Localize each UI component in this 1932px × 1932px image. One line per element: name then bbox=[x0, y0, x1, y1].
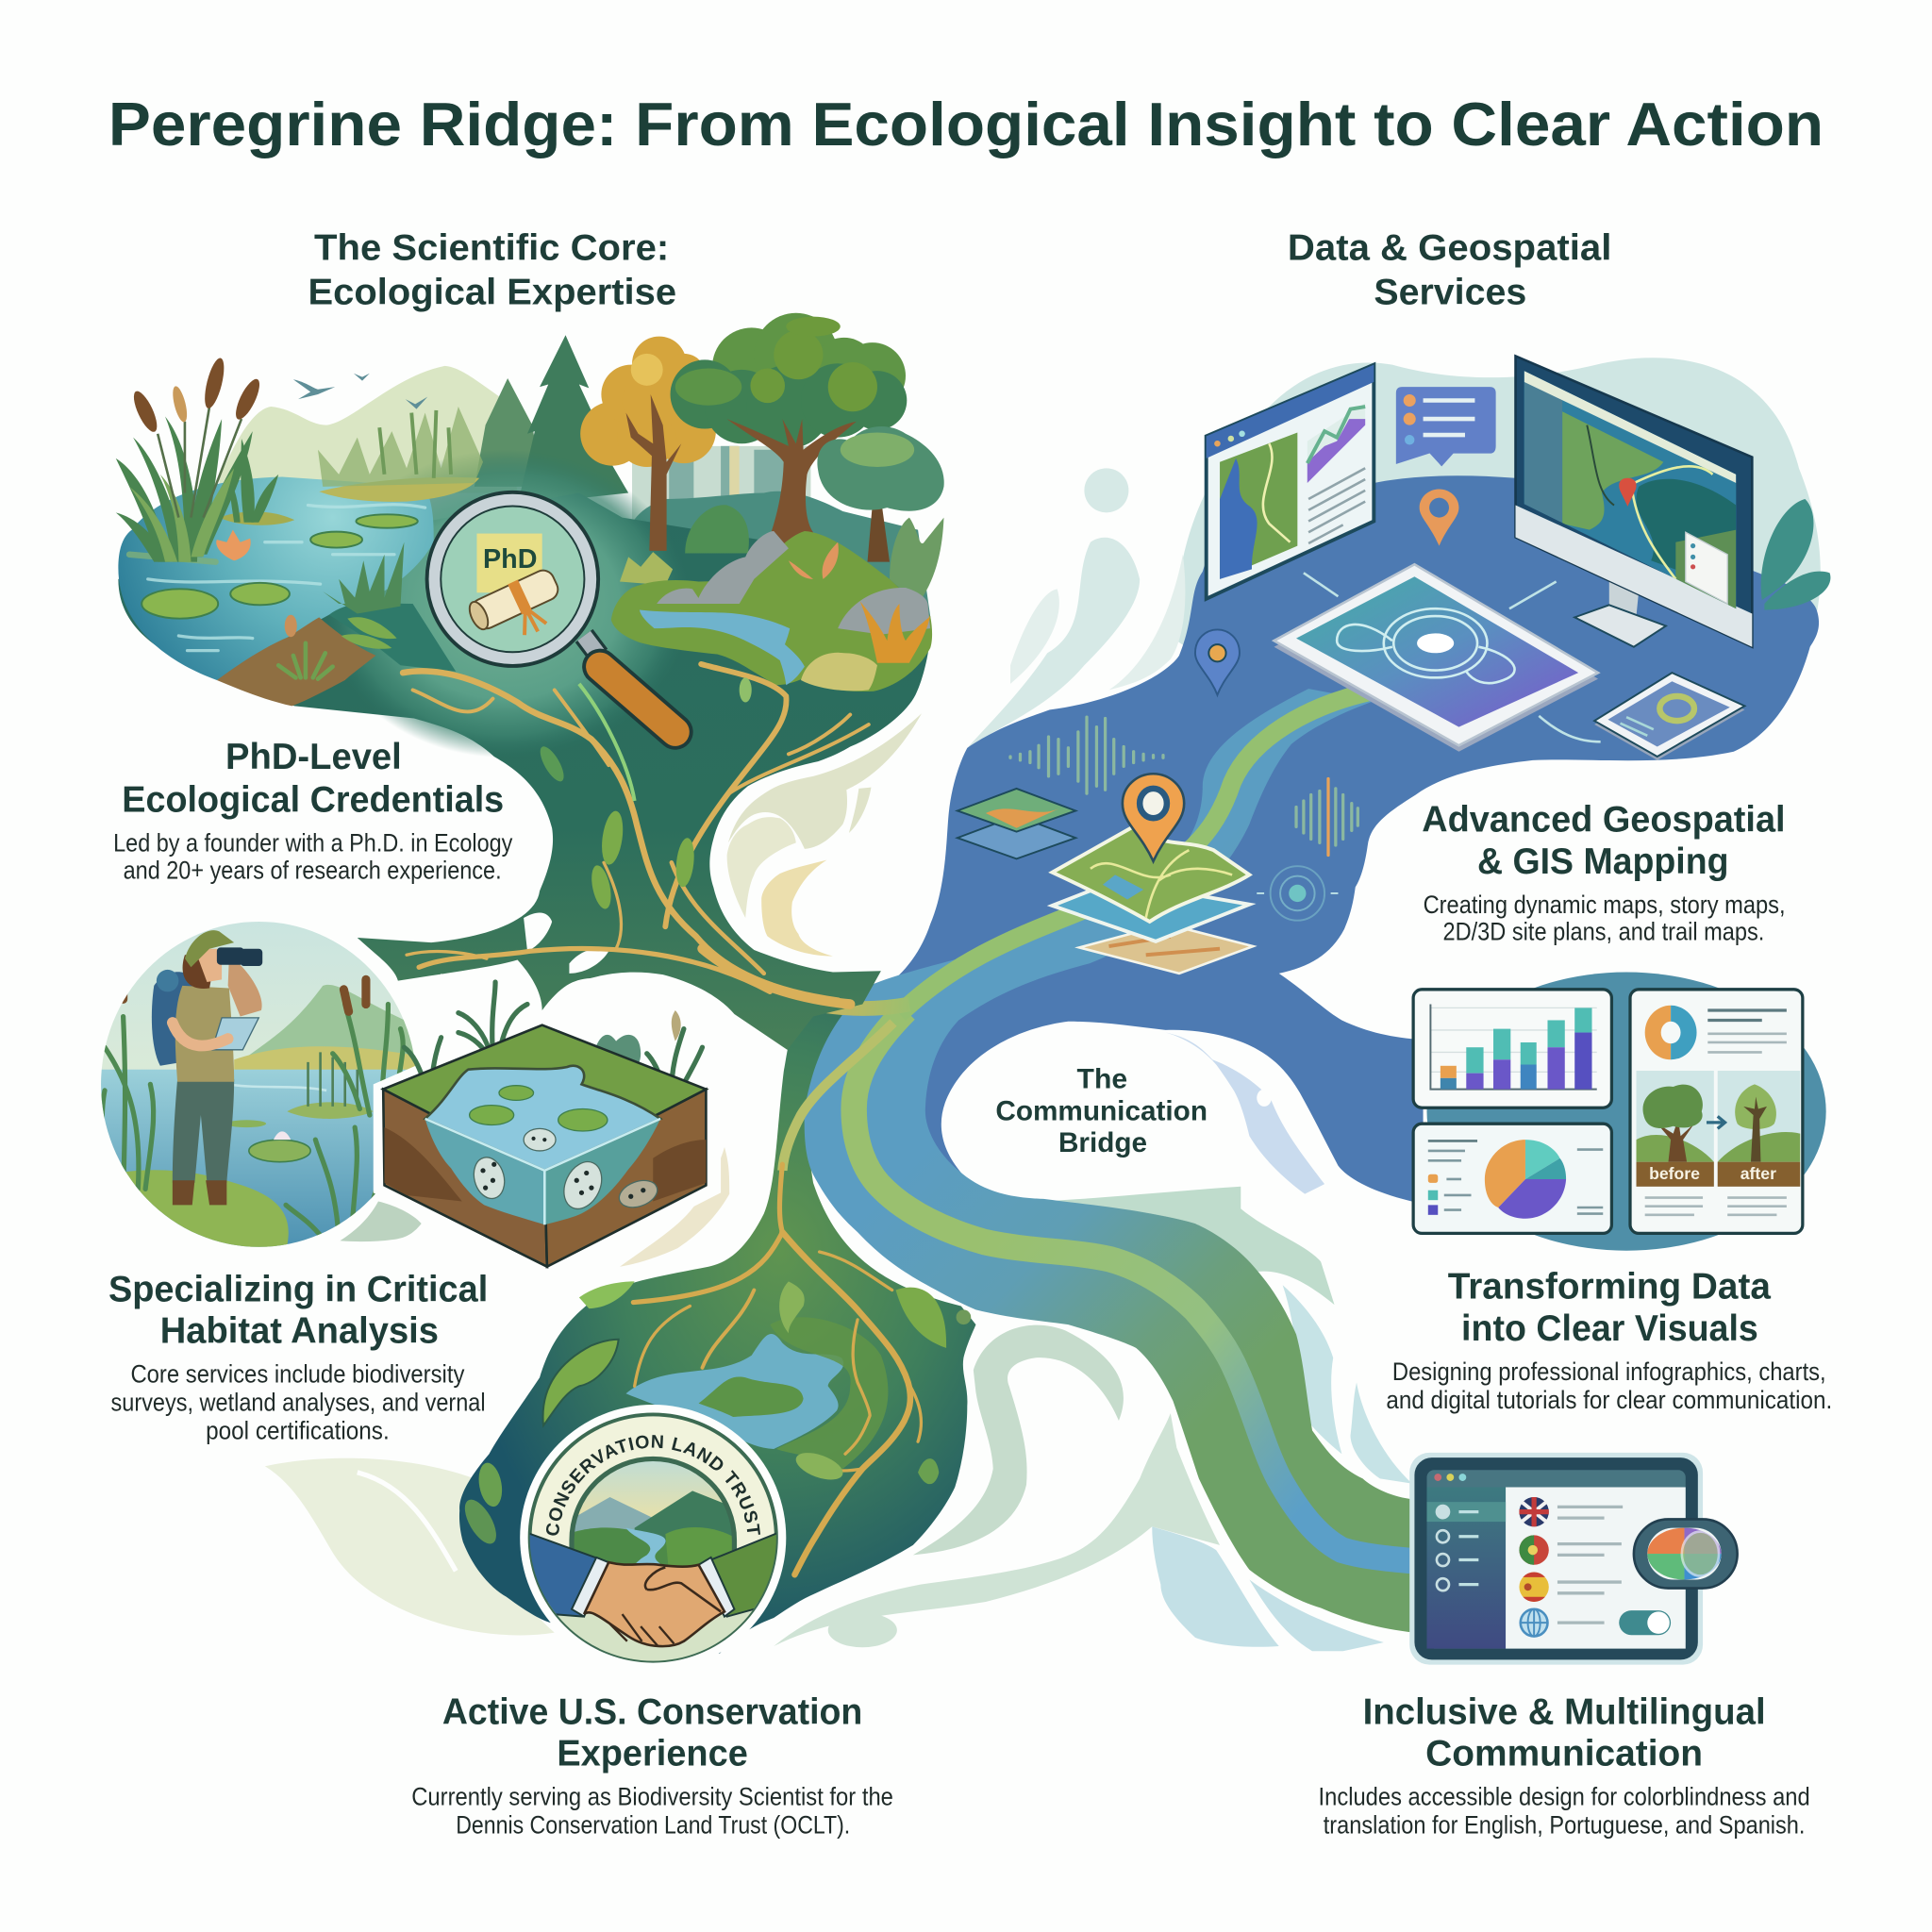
text block: phd-level ecological credentials bbox=[113, 737, 513, 884]
toggle bbox=[1619, 1610, 1671, 1635]
pond in lower blob bbox=[626, 1334, 843, 1449]
gold tree bbox=[580, 337, 716, 551]
hat bbox=[185, 930, 234, 967]
far shore reeds bbox=[318, 407, 483, 487]
heading: data and geospatial services bbox=[1288, 228, 1611, 313]
trunk bbox=[727, 419, 857, 579]
icon: small layers bbox=[958, 789, 1075, 858]
pale swooshes by devices bbox=[967, 468, 1185, 748]
leaf: upper left bbox=[579, 1281, 635, 1308]
text block: advanced geospatial and gis mapping: 2D/3D site plans, and trail maps. bbox=[1442, 918, 1764, 946]
after label: after bbox=[1740, 1164, 1776, 1183]
globe bbox=[1521, 1609, 1547, 1637]
island in pond bbox=[699, 1377, 804, 1417]
cream swirl beside trunk bbox=[727, 713, 922, 957]
icon: sound wave left bbox=[1010, 717, 1163, 793]
icon: website panel with map bbox=[1207, 365, 1374, 599]
text block: phd-level ecological credentials: and 20+ years of research experience. bbox=[124, 856, 502, 884]
big tree bbox=[671, 313, 907, 579]
icon: blue pin bbox=[1195, 629, 1240, 695]
text block: active u.s. conservation experience: Active U.S. Conservation bbox=[442, 1691, 862, 1732]
near reed clump bbox=[116, 416, 278, 562]
boots bbox=[173, 1180, 226, 1205]
green glow around lens bbox=[321, 450, 690, 758]
map pin bbox=[1123, 774, 1184, 861]
upper stripe to devices bbox=[899, 690, 1377, 1014]
icon: magnifying glass with PhD diploma bbox=[425, 491, 675, 732]
gold roots lower bbox=[633, 1164, 921, 1574]
icon: scientist with binoculars bbox=[152, 930, 262, 1205]
text block: inclusive and multilingual communication: Communication bbox=[1425, 1734, 1703, 1774]
sky hill bbox=[219, 366, 518, 492]
icon: sound wave right bbox=[1296, 778, 1357, 855]
panel: lower ecological root blob bbox=[459, 1004, 975, 1654]
orange water flower bbox=[216, 530, 251, 560]
lower blob details bbox=[458, 1164, 971, 1574]
pale arch below river bbox=[913, 1325, 1124, 1555]
amphibian egg masses bbox=[470, 1128, 661, 1215]
leaf group lower blob bbox=[458, 1281, 971, 1549]
text block: phd-level ecological credentials: Ecological Credentials bbox=[122, 780, 504, 821]
face bbox=[194, 949, 222, 982]
donut and before after card bbox=[1630, 990, 1803, 1233]
text block: advanced geospatial and gis mapping bbox=[1422, 800, 1786, 946]
pale blue swish in bridge bubble bbox=[1166, 1033, 1324, 1194]
text block: specializing in critical habitat analysis: Core services include biodiversity bbox=[130, 1359, 465, 1388]
icon: computer monitor with map bbox=[1516, 356, 1830, 647]
after tree bbox=[1735, 1084, 1776, 1162]
text block: active u.s. conservation experience: Experience bbox=[557, 1734, 748, 1774]
water ripples bbox=[129, 505, 425, 651]
left stripe branch into roots bbox=[776, 995, 909, 1008]
arrow bbox=[1707, 1116, 1725, 1128]
pine trees bbox=[475, 335, 628, 506]
legs bbox=[173, 1079, 234, 1183]
text block: transforming data into clear visuals: Transforming Data bbox=[1448, 1267, 1772, 1307]
forest bush mass bbox=[623, 491, 930, 616]
panel: field scientist scene bbox=[101, 922, 415, 1247]
main river stripe bbox=[854, 1010, 1414, 1561]
green land bbox=[770, 1317, 888, 1473]
stand bbox=[1609, 579, 1639, 616]
pale blue right of river bbox=[1283, 1285, 1341, 1454]
vest bbox=[175, 986, 234, 1082]
icon: connector lines bbox=[1304, 573, 1601, 741]
left soil face bbox=[383, 1090, 547, 1267]
text block: transforming data into clear visuals bbox=[1386, 1267, 1832, 1414]
text block: active u.s. conservation experience: Currently serving as Biodiversity Scientist for the bbox=[411, 1782, 893, 1810]
cattail stems bbox=[158, 407, 242, 518]
trunk leaves bbox=[536, 677, 752, 910]
before label: before bbox=[1649, 1164, 1700, 1183]
cream behind cube bbox=[620, 1147, 729, 1267]
icon: small tablet bbox=[1594, 673, 1744, 760]
pool lily pads bbox=[470, 1086, 608, 1131]
badge landscape bbox=[574, 1461, 732, 1566]
text block: transforming data into clear visuals: into Clear Visuals bbox=[1461, 1308, 1758, 1349]
binoculars bbox=[217, 947, 262, 966]
handle bbox=[584, 636, 599, 656]
text block: advanced geospatial and gis mapping: Advanced Geospatial bbox=[1422, 800, 1786, 841]
text block: transforming data into clear visuals: and digital tutorials for clear communication. bbox=[1386, 1386, 1832, 1414]
bar chart card bbox=[1413, 990, 1611, 1108]
white halo behind habitat cube bbox=[374, 1010, 721, 1281]
text block: phd-level ecological credentials: Led by a founder with a Ph.D. in Ecology bbox=[113, 829, 513, 858]
donut bbox=[1645, 1006, 1671, 1059]
leaf: big left bbox=[543, 1340, 619, 1425]
pale oval bbox=[828, 1613, 897, 1647]
flag Portugal bbox=[1519, 1535, 1549, 1565]
pool surface bbox=[425, 1066, 660, 1171]
tablet bbox=[212, 1018, 258, 1050]
label: the communication bridge: The bbox=[1077, 1063, 1127, 1094]
flag Spain bbox=[1519, 1573, 1549, 1602]
birds bbox=[293, 374, 427, 409]
heading: data and geospatial services: Services bbox=[1374, 273, 1526, 313]
cattails bbox=[129, 357, 264, 435]
text block: inclusive and multilingual communication: Inclusive & Multilingual bbox=[1363, 1691, 1766, 1732]
meadow island bbox=[611, 531, 932, 691]
crown highlights bbox=[675, 317, 877, 411]
tree and trunk mass bbox=[118, 492, 931, 1050]
front crown bbox=[671, 359, 907, 448]
small right tree bbox=[817, 426, 944, 562]
reeds in scene bbox=[98, 1004, 403, 1239]
far shore bbox=[319, 477, 479, 502]
text block: specializing in critical habitat analysis bbox=[108, 1269, 488, 1445]
rocks bbox=[657, 531, 930, 635]
flag UK bbox=[1519, 1497, 1549, 1526]
text block: advanced geospatial and gis mapping: Creating dynamic maps, story maps, bbox=[1424, 891, 1786, 919]
stream bbox=[640, 610, 805, 685]
badge lettering: CONSERVATION LAND TRUST bbox=[546, 1435, 760, 1536]
icon: vernal pool habitat cube bbox=[383, 982, 706, 1267]
bank grass bbox=[278, 643, 333, 679]
pale green crescent by scene bbox=[340, 1201, 422, 1241]
icon: tablet with radar bbox=[1274, 564, 1598, 752]
hair bbox=[183, 955, 216, 989]
icon: multilingual tablet interface bbox=[1409, 1453, 1738, 1665]
text block: inclusive and multilingual communication bbox=[1319, 1691, 1810, 1840]
arm bbox=[228, 955, 262, 1017]
panel: data and geospatial services pale backdrop bbox=[1176, 358, 1821, 764]
pale blue below river bbox=[1152, 1526, 1279, 1647]
panel: upper ecological tree blob bbox=[116, 313, 944, 1050]
right soil face bbox=[544, 1090, 706, 1267]
background swooshes bbox=[265, 713, 1412, 1651]
background green bush bbox=[685, 505, 749, 553]
text block: specializing in critical habitat analysis: pool certifications. bbox=[206, 1417, 390, 1445]
text block: active u.s. conservation experience bbox=[411, 1691, 893, 1840]
label: the communication bridge bbox=[995, 1063, 1208, 1158]
lily pads bbox=[142, 514, 418, 619]
back crown bbox=[712, 313, 906, 409]
pond bbox=[118, 476, 434, 680]
icon: chat bubble bbox=[1395, 386, 1497, 468]
badge lower field bbox=[530, 1532, 776, 1661]
text block: specializing in critical habitat analysis: surveys, wetland analyses, and vernal bbox=[111, 1389, 486, 1417]
pale left of lower blob bbox=[265, 1458, 555, 1635]
pie bbox=[1485, 1140, 1525, 1208]
heading: data and geospatial services: Data & Geospatial bbox=[1288, 228, 1611, 269]
leaves by monitor bbox=[1761, 499, 1830, 610]
pie chart card bbox=[1413, 1124, 1611, 1233]
title: Peregrine Ridge: From Ecological Insight to Clear Action bbox=[108, 90, 1824, 158]
heading: the scientific core: The Scientific Core: bbox=[314, 228, 669, 269]
pale foreground plant bbox=[801, 653, 877, 691]
forest backdrop bbox=[632, 446, 810, 530]
panel: geospatial blue stream bbox=[862, 475, 1819, 1214]
right leafy plant bbox=[890, 518, 943, 604]
panel: data visuals backdrop bbox=[1426, 973, 1826, 1251]
colorblind lens bbox=[1634, 1519, 1738, 1589]
panel: data visuals cards bbox=[1413, 990, 1803, 1233]
lens bbox=[425, 491, 600, 668]
icon: stacked map layers with pin bbox=[1052, 774, 1253, 974]
blue sleeve bbox=[530, 1533, 608, 1618]
icon: orange pin bbox=[1420, 490, 1458, 546]
water block left bbox=[425, 1119, 544, 1224]
text block: active u.s. conservation experience: Dennis Conservation Land Trust (OCLT). bbox=[456, 1811, 850, 1840]
text block: phd-level ecological credentials: PhD-Level bbox=[225, 737, 402, 777]
handshake bbox=[584, 1562, 724, 1646]
text block: advanced geospatial and gis mapping: & GIS Mapping bbox=[1477, 841, 1728, 882]
label: the communication bridge: Communication bbox=[995, 1095, 1208, 1126]
mid grass bbox=[323, 542, 404, 613]
after scene bbox=[1718, 1071, 1800, 1187]
forearm bbox=[173, 1023, 228, 1045]
water block right bbox=[544, 1119, 660, 1224]
white gaps in trunk bbox=[438, 912, 608, 1025]
down stripe branch into roots bbox=[782, 1023, 893, 1171]
panel: device cluster bbox=[958, 356, 1830, 974]
before scene bbox=[1637, 1071, 1714, 1187]
pale green above river bbox=[1043, 1187, 1335, 1305]
panel: communication bridge river bbox=[776, 689, 1414, 1633]
text block: transforming data into clear visuals: Designing professional infographics, charts, bbox=[1392, 1357, 1826, 1386]
green bank by lens bbox=[329, 603, 456, 672]
cuffs bbox=[572, 1557, 608, 1617]
icon: radar dot bbox=[1257, 866, 1338, 921]
gold roots upper bbox=[403, 664, 869, 1004]
icon: conservation land trust badge bbox=[520, 1405, 787, 1663]
text block: inclusive and multilingual communication: Includes accessible design for colorblindness and bbox=[1319, 1782, 1810, 1810]
mud bank bbox=[217, 617, 375, 706]
text block: specializing in critical habitat analysis: Specializing in Critical bbox=[108, 1269, 488, 1309]
pale band below river bbox=[774, 1413, 1220, 1646]
grass top bbox=[383, 1025, 706, 1173]
orange plants bbox=[860, 601, 930, 663]
grass tufts bbox=[404, 982, 702, 1091]
text block: inclusive and multilingual communication: translation for English, Portuguese, and Spanish. bbox=[1324, 1811, 1805, 1840]
near shore bbox=[219, 511, 294, 525]
heading: the scientific core bbox=[308, 228, 676, 313]
icon: magnifying glass with PhD diploma: PhD bbox=[483, 544, 537, 575]
before tree bbox=[1643, 1085, 1703, 1162]
label: the communication bridge: Bridge bbox=[1058, 1127, 1147, 1158]
scroll bbox=[465, 566, 572, 655]
backpack bbox=[152, 972, 197, 1066]
text block: specializing in critical habitat analysis: Habitat Analysis bbox=[160, 1311, 439, 1352]
heading: the scientific core: Ecological Expertise bbox=[308, 273, 676, 313]
green sleeve bbox=[712, 1532, 776, 1618]
